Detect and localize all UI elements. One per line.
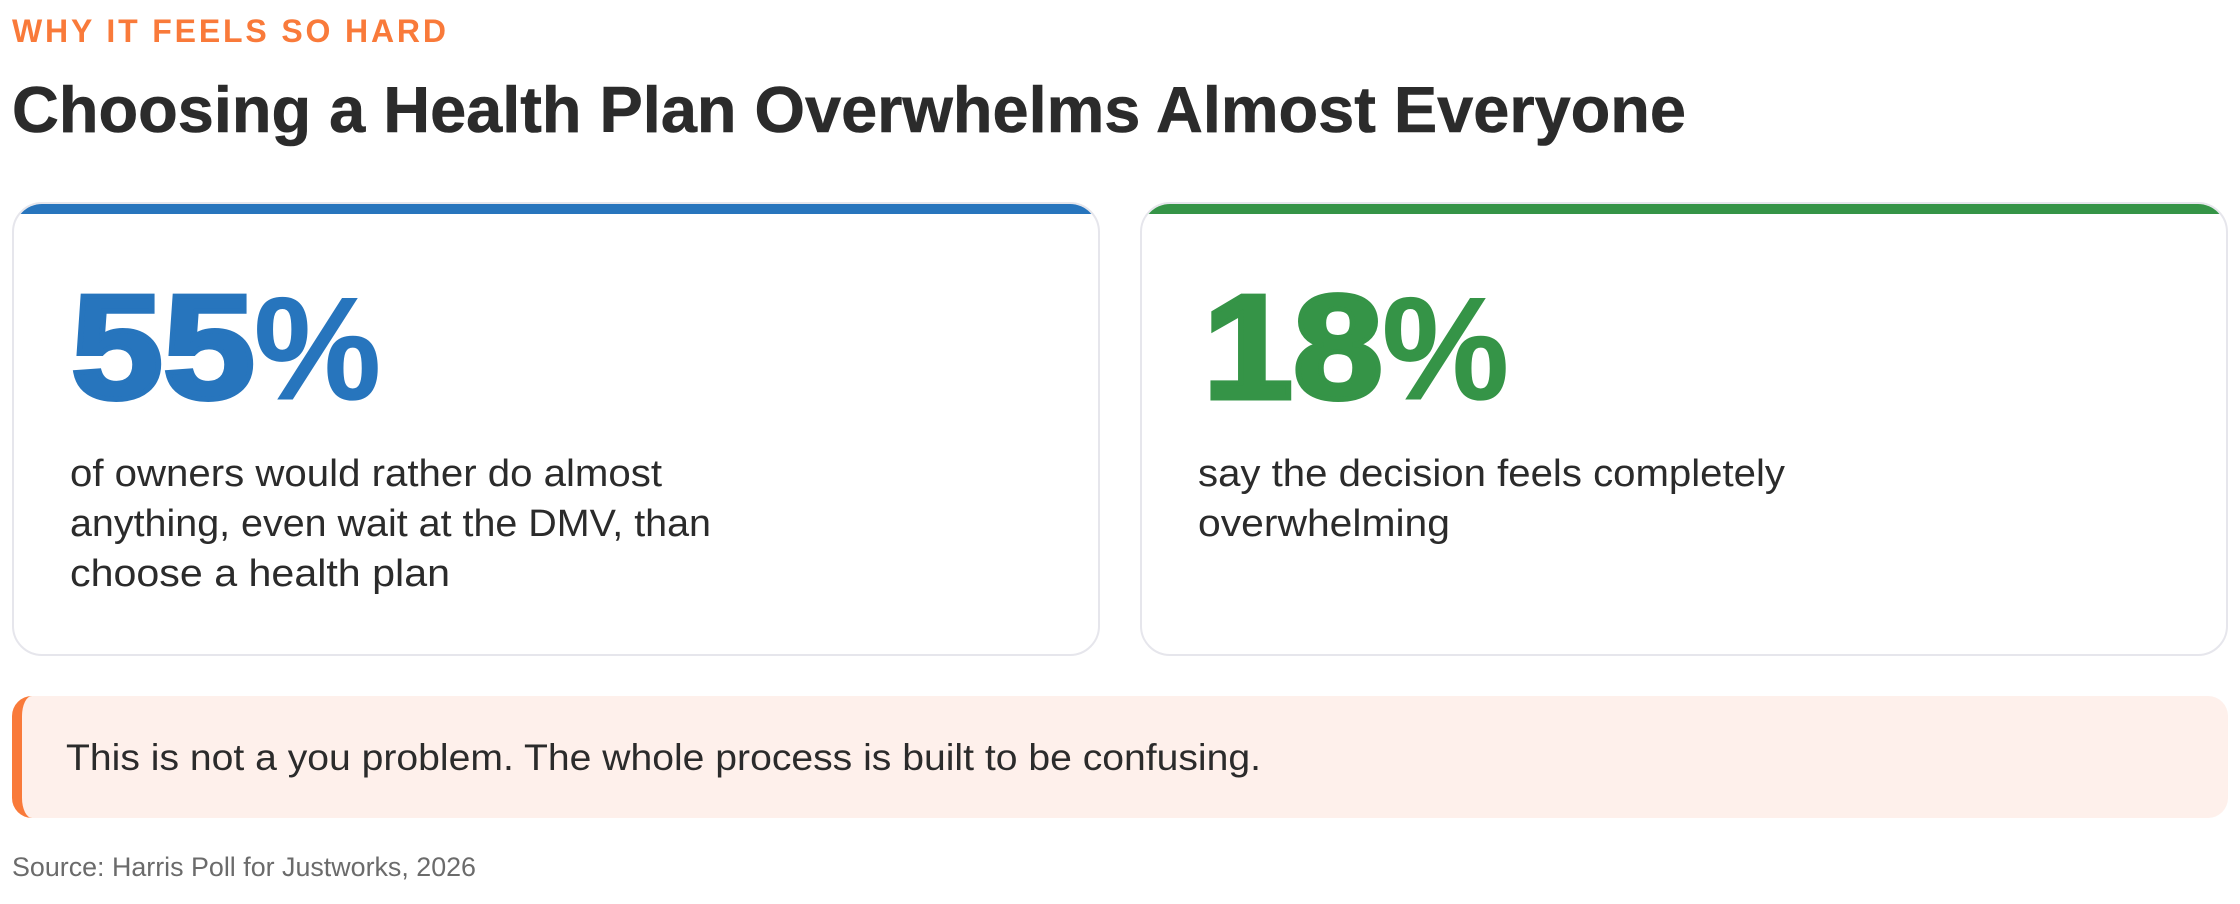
panel: 18% stat card [1141, 203, 2227, 655]
description text: say the decision feels completely [1198, 453, 1785, 495]
big number 55%: 55 [71, 265, 255, 430]
panel: 55% stat card [13, 203, 1099, 655]
description text [70, 453, 711, 595]
description text: choose a health plan [70, 553, 450, 595]
source note: Source: Harris Poll for Justworks, 2026 [12, 852, 476, 882]
description text: anything, even wait at the DMV, than [70, 503, 711, 545]
description text: of owners would rather do almost [70, 453, 662, 495]
big number 55% [71, 265, 381, 430]
title: Choosing a Health Plan Overwhelms Almost Everyone [12, 73, 1686, 146]
callout background [22, 696, 2228, 818]
big number 18% [1203, 265, 1509, 430]
eyebrow label: WHY IT FEELS SO HARD [12, 13, 446, 49]
card frame [1141, 203, 2227, 655]
blue top bar [14, 204, 1098, 214]
callout orange edge [12, 696, 212, 818]
green top bar [1142, 204, 2226, 214]
description text [1198, 453, 1785, 545]
callout [12, 696, 2228, 818]
description text: overwhelming [1198, 503, 1450, 545]
big number 18%: % [1382, 267, 1509, 430]
big number 55%: % [254, 267, 381, 430]
callout text: This is not a you problem. The whole process is built to be confusing. [66, 737, 1261, 778]
card frame [13, 203, 1099, 655]
big number 18%: 18 [1203, 265, 1383, 430]
